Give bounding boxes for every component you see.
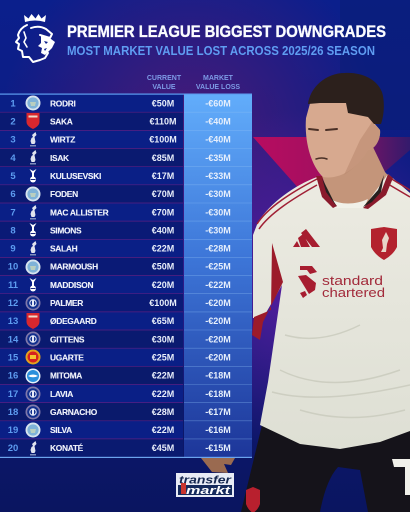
row 14 [8,332,231,346]
row 5 [10,169,231,182]
row 19 [8,422,231,438]
head [306,95,380,177]
row 17: LAVIA [50,389,73,399]
row 16: €22M [152,371,174,381]
magenta diamond backdrop [253,137,410,226]
row 7: €70M [152,207,174,217]
row 14: €30M [152,334,174,344]
row 13: 13 [8,316,18,327]
row 2: 2 [10,116,16,128]
row 1: 1 [10,98,16,109]
row 8: SIMONS [50,225,82,235]
row 17: €22M [152,389,174,399]
row 3 [10,132,231,146]
row 6: -€30M [205,189,231,199]
row 9 [10,241,231,256]
row 4: €85M [152,153,174,163]
row 5: €17M [152,171,174,181]
row 6: 6 [10,189,16,200]
column header: market value loss [196,75,240,91]
row 14: GITTENS [50,334,85,344]
row 19: 19 [8,425,18,436]
row 12: 12 [8,298,18,309]
row 9: €22M [152,244,174,254]
sleeve red [252,243,283,340]
row 16: 16 [8,371,18,382]
row 4: ISAK [50,153,69,163]
shirt [253,174,410,449]
row 7 [10,205,231,220]
row 10 [8,260,231,274]
row 4: 4 [10,153,16,164]
shorts [241,425,410,512]
logo: Premier League lion [16,14,55,62]
row 20: €45M [152,443,174,453]
row 11: MADDISON [50,280,93,290]
player photo: chartered [322,285,385,300]
row 15 [8,350,231,364]
row 9: SALAH [50,244,78,254]
row 3: WIRTZ [50,135,75,145]
row 18: €28M [152,407,174,417]
sponsor mark [298,266,317,298]
row 5: KULUSEVSKI [50,171,101,181]
row 13: ØDEGAARD [50,316,97,326]
row 1 [10,96,231,110]
row 9: -€28M [205,244,231,254]
column header: current value: VALUE [152,84,176,91]
row 14: 14 [8,334,19,345]
collar [316,174,393,209]
column header: current value: CURRENT [147,75,182,82]
row 17 [8,386,231,402]
transfermarkt logo: markt [186,485,232,497]
row 10: MARMOUSH [50,262,98,272]
neck [320,145,392,210]
row 16: -€18M [205,371,231,381]
row 19: €22M [152,425,174,435]
column header: market value loss: MARKET [203,75,234,82]
row 13: -€20M [205,316,231,326]
row 3: 3 [10,135,16,146]
row 17: 17 [8,389,18,400]
hair [308,73,384,124]
row 4 [10,150,231,164]
row 12 [8,296,231,310]
row 8 [10,223,231,236]
eyes and mouth [309,129,337,159]
row 13 [8,313,231,329]
column header: current value [147,75,182,91]
row 1: -€60M [205,98,231,108]
row 10: €50M [152,262,174,272]
table backgrounds [0,94,252,458]
row 11: €20M [152,280,174,290]
transfermarkt logo [176,473,234,497]
row 15: UGARTE [50,352,84,362]
row 6: FODEN [50,189,78,199]
row 19: SILVA [50,425,72,435]
row 2: -€40M [205,116,231,126]
row 20 [8,441,231,456]
adidas logo [293,229,320,247]
row 20: -€15M [205,443,231,453]
subtitle: MOST MARKET VALUE LOST ACROSS 2025/26 SEASON [67,43,375,58]
row 12: PALMER [50,298,83,308]
row 4: -€35M [205,153,231,163]
row 16: MITOMA [50,371,82,381]
row 11: -€22M [205,280,231,290]
row 10: 10 [8,262,18,273]
tee [331,199,368,208]
row 6: €70M [152,189,174,199]
row 18: 18 [8,407,18,418]
shirt shoulder stripes [257,178,410,229]
sponsor text: standard [322,273,383,288]
row 11: 11 [8,280,19,291]
row 15: -€20M [205,352,231,362]
row 9: 9 [10,244,16,255]
liverpool crest [371,227,397,260]
row 16 [8,368,231,384]
row 2: SAKA [50,116,73,126]
row 7: MAC ALLISTER [50,207,109,217]
row 2 [10,113,231,129]
row 7: -€30M [205,207,231,217]
short number [392,459,410,495]
row 7: 7 [10,207,16,218]
transfermarkt logo: transfer [179,474,232,486]
row 5: 5 [10,171,16,182]
player photo [201,73,410,512]
row 20: KONATÉ [50,442,84,453]
row 15: €25M [152,352,174,362]
row 12: €100M [149,298,177,308]
row 18 [8,404,231,420]
row 12: -€20M [205,298,231,308]
shade on face [344,122,380,175]
row 18: GARNACHO [50,407,98,417]
row 11 [8,278,231,292]
row 8: €40M [152,225,174,235]
row 8: -€30M [205,225,231,235]
row 20: 20 [8,443,18,454]
row 18: -€17M [205,407,231,417]
row 8: 8 [10,225,16,236]
row 1: RODRI [50,98,76,108]
row 19: -€16M [205,425,231,435]
row 10: -€25M [205,262,231,272]
shorts crest [246,487,260,512]
hand [201,458,235,473]
row 15: 15 [8,352,19,364]
row 13: €65M [152,316,174,326]
column header: market value loss: VALUE LOSS [196,84,240,91]
row 2: €110M [149,116,177,126]
shirt folds [272,325,410,418]
row 6 [10,186,231,202]
row 5: -€33M [205,171,231,181]
row 17: -€18M [205,389,231,399]
row 14: -€20M [205,334,231,344]
row 3: €100M [149,135,177,145]
row 1: €50M [152,98,174,108]
row 3: -€40M [205,135,231,145]
